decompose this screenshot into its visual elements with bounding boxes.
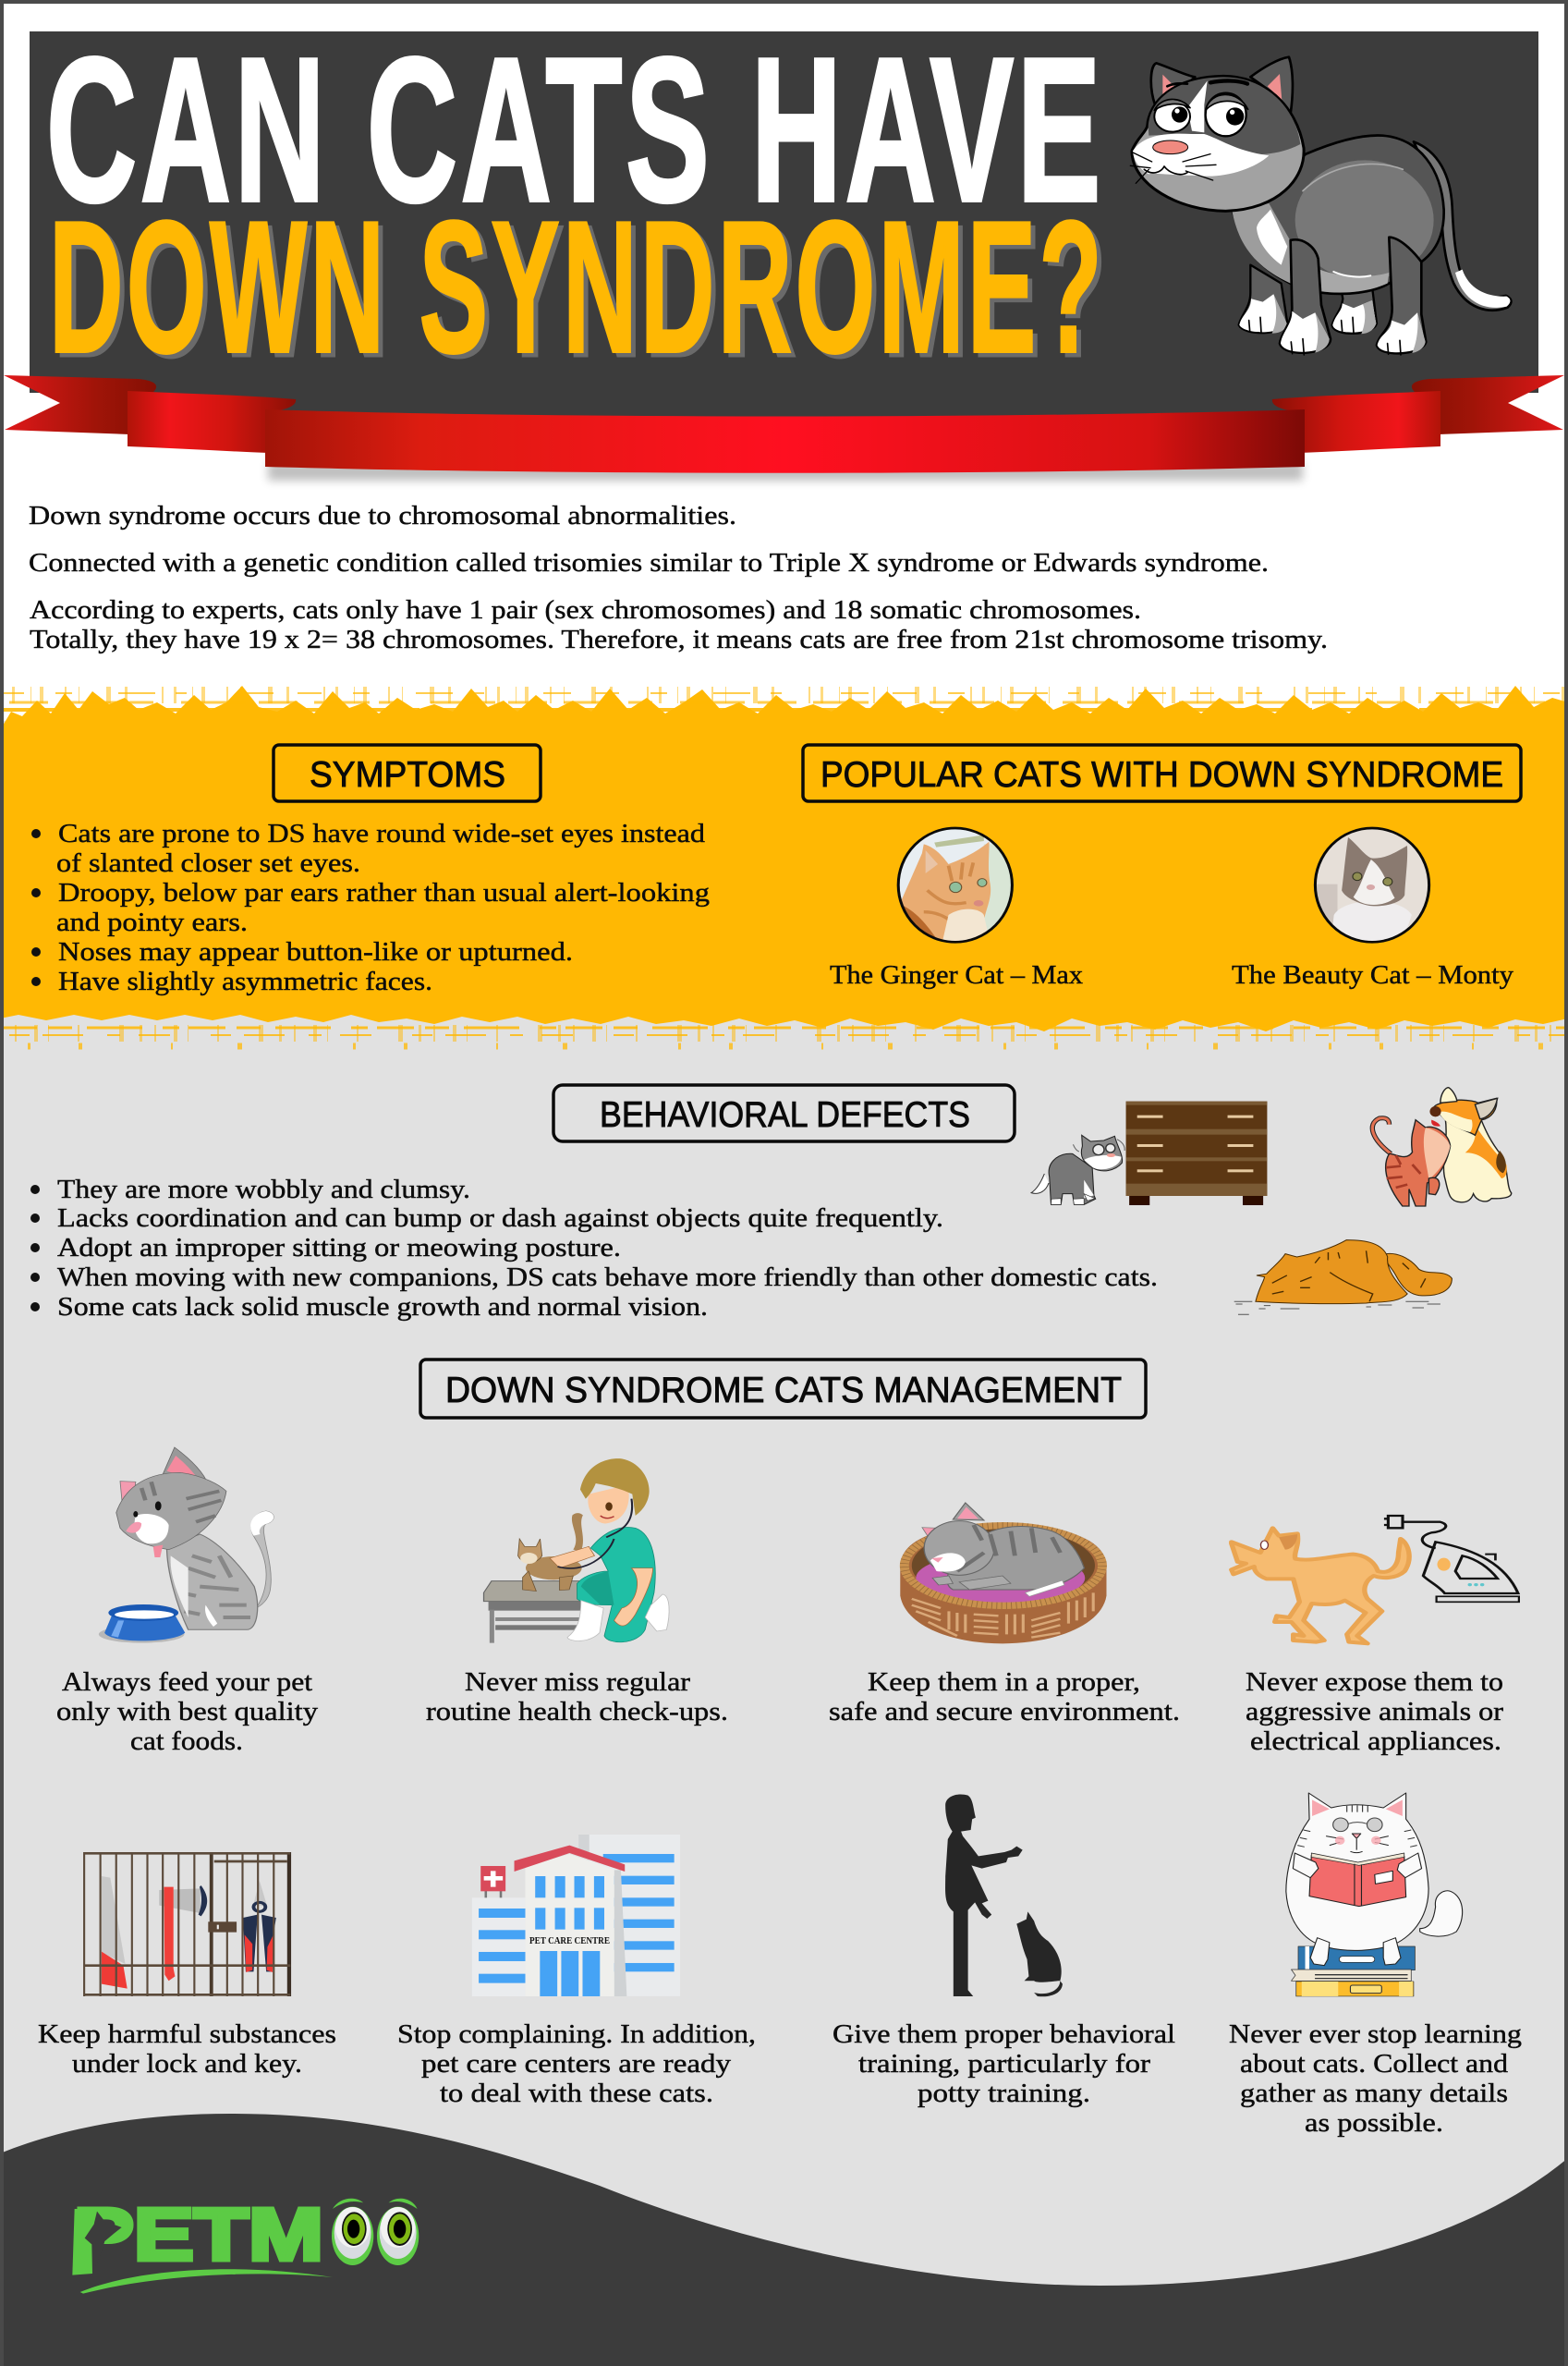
list: symptoms: of slanted closer set eyes. <box>56 848 360 878</box>
list: symptoms: Cats are prone to DS have round wide-set eyes instead <box>58 819 706 848</box>
icon: cat with food bowl <box>99 1447 273 1643</box>
caption group: first row of tips: safe and secure environment. <box>829 1697 1180 1726</box>
photo: beauty cat Monty <box>1313 825 1433 945</box>
list: behavioral defects: Some cats lack solid muscle growth and normal vision. <box>57 1292 708 1322</box>
caption group: second row of tips: Keep harmful substances <box>38 2019 336 2049</box>
caption: Max: The Ginger Cat – Max <box>830 960 1084 990</box>
caption group: first row of tips: only with best quality <box>56 1697 319 1726</box>
caption group: second row of tips: pet care centers are ready <box>421 2049 732 2079</box>
caption group: first row of tips: cat foods. <box>130 1726 243 1756</box>
building sign: PET CARE CENTRE <box>529 1935 610 1946</box>
list: symptoms: and pointy ears. <box>56 908 248 937</box>
panel: title header <box>30 16 1538 418</box>
icon: aggressive dog and iron <box>1232 1516 1519 1643</box>
text block: introduction: According to experts, cats only have 1 pair (sex chromosomes) and 18 somatic chromosomes. <box>30 595 1141 625</box>
caption group: first row of tips: routine health check-ups. <box>426 1697 728 1726</box>
text block: introduction <box>29 501 1328 654</box>
caption group: first row of tips: aggressive animals or <box>1246 1697 1503 1726</box>
list: behavioral defects: They are more wobbly and clumsy. <box>57 1175 470 1204</box>
caption group: second row of tips: potty training. <box>918 2079 1090 2108</box>
list: behavioral defects: When moving with new companions, DS cats behave more friendly than other domestic cats. <box>57 1262 1158 1292</box>
caption group: first row of tips: Never miss regular <box>465 1667 690 1697</box>
icon: vet checking a cat <box>484 1458 669 1643</box>
caption group: second row of tips: Never ever stop learning <box>1229 2019 1522 2049</box>
caption group: second row of tips: about cats. Collect and <box>1240 2049 1509 2079</box>
icon: cat in a basket <box>900 1503 1106 1643</box>
heading: management: DOWN SYNDROME CATS MANAGEMENT <box>445 1371 1122 1410</box>
caption group: second row of tips: under lock and key. <box>72 2049 302 2079</box>
caption group: second row of tips: as possible. <box>1305 2108 1443 2138</box>
caption group: second row of tips: training, particularly for <box>858 2049 1150 2079</box>
band: yellow brushed section <box>0 686 1568 1046</box>
list: behavioral defects: Adopt an improper sitting or meowing posture. <box>57 1233 621 1262</box>
list: symptoms: Droopy, below par ears rather than usual alert-looking <box>58 878 710 908</box>
caption group: second row of tips: to deal with these cats. <box>440 2079 713 2108</box>
caption group: second row of tips <box>38 2019 1522 2138</box>
caption group: second row of tips: Stop complaining. In addition, <box>397 2019 756 2049</box>
heading: symptoms: SYMPTOMS <box>310 755 505 795</box>
icon: orange cat lying down <box>1234 1240 1452 1314</box>
icon: cat and dog companions <box>1372 1088 1512 1206</box>
heading: behavioral defects: BEHAVIORAL DEFECTS <box>600 1095 970 1135</box>
text block: introduction: Totally, they have 19 x 2= 38 chromosomes. Therefore, it means cats are free from 21st chromosome trisomy. <box>30 625 1328 654</box>
icon: person training a cat silhouette <box>945 1795 1063 1996</box>
logo: PETMOO <box>72 2193 419 2294</box>
heading: popular cats: POPULAR CATS WITH DOWN SYNDROME <box>820 755 1503 795</box>
icon: pet care centre building <box>472 1835 680 1996</box>
heading: management <box>420 1360 1146 1418</box>
icon: cat reading on books <box>1286 1793 1463 1996</box>
list: symptoms <box>31 819 710 996</box>
caption group: first row of tips: Never expose them to <box>1246 1667 1503 1697</box>
text block: introduction: Connected with a genetic condition called trisomies similar to Triple X syndrome or Edwards syndrome. <box>29 548 1269 578</box>
list: behavioral defects <box>30 1175 1158 1322</box>
list: symptoms: Noses may appear button-like or upturned. <box>58 937 573 967</box>
caption: Monty: The Beauty Cat – Monty <box>1232 960 1514 990</box>
heading: popular cats <box>803 745 1521 801</box>
caption group: first row of tips: electrical appliances. <box>1250 1726 1501 1756</box>
ribbon banner <box>4 375 1564 481</box>
photo: ginger cat Max <box>895 825 1015 945</box>
list: symptoms: Have slightly asymmetric faces. <box>58 967 432 996</box>
caption group: first row of tips: Keep them in a proper, <box>868 1667 1140 1697</box>
heading: behavioral defects <box>553 1085 1015 1141</box>
caption group: second row of tips: gather as many details <box>1240 2079 1508 2108</box>
caption group: first row of tips <box>56 1667 1503 1756</box>
icon: grey cat mascot <box>1130 57 1511 355</box>
logo: PETMOO: PETM <box>74 2193 323 2275</box>
icon: tools locked in a cage <box>84 1852 290 1996</box>
footer: dark wave <box>0 2114 1568 2366</box>
icon: clumsy cat bumping a dresser <box>1031 1102 1267 1205</box>
heading: symptoms <box>273 745 541 801</box>
text block: introduction: Down syndrome occurs due to chromosomal abnormalities. <box>29 501 736 531</box>
list: behavioral defects: Lacks coordination and can bump or dash against objects quite frequently. <box>57 1203 943 1233</box>
caption group: second row of tips: Give them proper behavioral <box>833 2019 1175 2049</box>
caption group: first row of tips: Always feed your pet <box>62 1667 312 1697</box>
